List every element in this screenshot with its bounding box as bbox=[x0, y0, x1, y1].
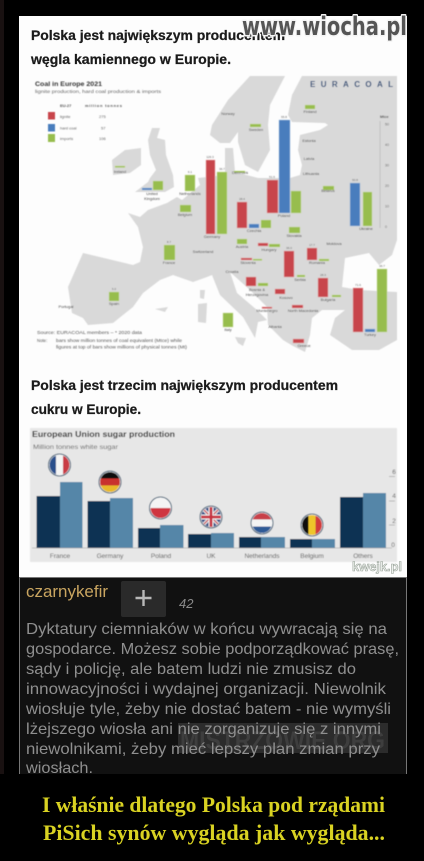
comment body bbox=[25, 621, 399, 777]
country labels: Greece bbox=[297, 343, 311, 348]
value axis: 6 bbox=[392, 469, 396, 476]
source note bbox=[37, 330, 188, 350]
Coal title and legend bbox=[35, 82, 162, 142]
flag: Netherlands bbox=[251, 512, 273, 534]
country labels: 71.6 bbox=[355, 283, 361, 287]
value axis: 0 bbox=[391, 542, 395, 549]
Mtce axis bbox=[380, 115, 389, 229]
Mtce axis: 10 bbox=[385, 204, 389, 208]
chart title: European Union sugar production bbox=[32, 429, 175, 439]
country labels: Hungary bbox=[261, 247, 277, 252]
comment body: sądy i policję, ale batem ludzi nie zmusisz do bbox=[26, 661, 356, 678]
country labels: Norway bbox=[221, 111, 235, 116]
Mtce axis: 40 bbox=[385, 143, 389, 147]
Coal title and legend: hard coal bbox=[60, 126, 77, 130]
heading: sugar: cukru w Europie. bbox=[31, 401, 141, 417]
source note: bars show million tonnes of coal equivalent (Mtce) while bbox=[56, 338, 183, 343]
flag: UK bbox=[200, 506, 222, 528]
dark bars bbox=[36, 496, 363, 548]
country labels: Croatia bbox=[226, 269, 239, 274]
plus button bbox=[121, 581, 166, 617]
country labels: 5.0 bbox=[112, 287, 116, 291]
heading: coal: Polska jest największym producentem bbox=[31, 27, 285, 43]
country axis labels: Germany bbox=[97, 553, 124, 560]
source note: figures at top of bars show millions of physical tonnes (Mt) bbox=[56, 344, 188, 350]
heading: coal: węgla kamiennego w Europie. bbox=[30, 51, 231, 67]
country labels: Montenegro bbox=[256, 308, 278, 313]
comment body: niewolnikami, żeby mieć lepszy plan zmian przy bbox=[26, 741, 380, 758]
country labels: Italy bbox=[224, 327, 232, 332]
country labels: Denmark bbox=[232, 170, 248, 175]
flag: Belgium bbox=[301, 514, 324, 536]
flag: France bbox=[48, 454, 71, 476]
country labels: 28.3 bbox=[320, 273, 326, 277]
Coal title and legend: million tonnes bbox=[85, 103, 123, 108]
country labels: 17.7 bbox=[309, 243, 315, 247]
country labels: France bbox=[163, 260, 176, 265]
country labels: Ireland bbox=[114, 169, 126, 174]
Mtce axis: Mtce bbox=[380, 115, 389, 119]
watermark: mistrzowie: MISTRZOWIE.ORG bbox=[180, 727, 385, 755]
baseline bbox=[32, 547, 392, 549]
map land bbox=[68, 76, 397, 352]
caption band bbox=[0, 774, 424, 861]
country labels: Portugal bbox=[59, 304, 74, 309]
comment body: lżejszego wiosła ani nie zorganizuje się z innymi bbox=[26, 721, 381, 738]
panel: comment bbox=[19, 577, 407, 777]
country labels: Ukraine bbox=[359, 226, 374, 231]
country labels: 8.7 bbox=[167, 240, 171, 244]
value axis: 4 bbox=[392, 493, 396, 500]
heading: coal bbox=[30, 27, 285, 67]
country labels: Serbia bbox=[294, 277, 307, 282]
country labels: United bbox=[146, 191, 158, 196]
country labels: 51.6 bbox=[269, 175, 275, 179]
country axis labels: Others bbox=[353, 553, 373, 560]
country labels: Belarus bbox=[321, 188, 335, 193]
country labels: 126.3 bbox=[206, 155, 214, 159]
country labels: Lithuania bbox=[303, 171, 320, 176]
country labels: Kosovo bbox=[279, 295, 293, 300]
bars: hard coal bbox=[142, 120, 375, 332]
country labels: Austria bbox=[236, 244, 249, 249]
comment body: innowacyjności i wydajnej organizacji. Niewolnik bbox=[26, 681, 386, 698]
Coal title and legend: 57 bbox=[101, 126, 106, 130]
Coal title and legend: 106 bbox=[99, 136, 106, 141]
country axis labels: Poland bbox=[151, 553, 171, 560]
country labels: Bulgaria bbox=[321, 297, 336, 302]
country labels: 6.1 bbox=[188, 170, 192, 174]
country labels: Slovenia bbox=[240, 260, 256, 265]
country labels: 36.7 bbox=[219, 167, 225, 171]
country labels: Herzegovina bbox=[246, 292, 269, 297]
country axis labels bbox=[50, 553, 373, 560]
country labels: Sweden bbox=[249, 127, 263, 132]
Coal title and legend: 275 bbox=[99, 114, 106, 119]
country labels: Latvia bbox=[304, 156, 315, 161]
country labels: Switzerland bbox=[193, 249, 213, 254]
country labels: Finland bbox=[303, 109, 317, 114]
value axis bbox=[389, 469, 396, 549]
map: coal in Europe bbox=[35, 76, 397, 352]
Coal title and legend: Coal in Europe 2021 bbox=[35, 82, 103, 88]
Mtce axis: 50 bbox=[385, 122, 389, 126]
country labels: 36.0 bbox=[286, 246, 292, 250]
caption text bbox=[42, 792, 385, 845]
Mtce axis: 20 bbox=[385, 184, 389, 188]
bars: lignite bbox=[206, 160, 363, 343]
panel: white infographic sheet bbox=[19, 16, 407, 577]
country labels: Romania bbox=[309, 260, 326, 265]
bars: imports bbox=[109, 105, 387, 332]
country axis labels: Belgium bbox=[300, 553, 324, 560]
flag: Poland bbox=[150, 497, 172, 519]
heading: sugar: Polska jest trzecim największym producentem bbox=[31, 377, 338, 393]
caption text: I właśnie dlatego Polska pod rządami bbox=[42, 792, 385, 817]
Coal title and legend: lignite production, hard coal production & imports bbox=[35, 89, 162, 94]
comment body: gospodarce. Możesz sobie podporządkować prasę, bbox=[26, 641, 399, 658]
country labels: Kingdom bbox=[144, 196, 161, 201]
country labels: Slovakia bbox=[286, 233, 302, 238]
light bars bbox=[60, 482, 386, 548]
comment username: czarnykefir bbox=[26, 583, 109, 601]
heading: sugar bbox=[31, 377, 338, 417]
watermark: kwejk: kwejk.pl bbox=[352, 559, 402, 574]
country labels: Poland bbox=[278, 213, 290, 218]
comment body: Dyktatury ciemniaków w końcu wywracają się na bbox=[26, 621, 387, 638]
EURACOAL logo: EURACOAL bbox=[310, 80, 395, 89]
country labels: 50.8 bbox=[352, 178, 358, 182]
chart subtitle: Million tonnes white sugar bbox=[33, 444, 119, 451]
country labels: 55.8 bbox=[281, 115, 287, 119]
Coal title and legend: EU-27 bbox=[60, 103, 72, 108]
value axis: 2 bbox=[392, 518, 396, 525]
Coal title and legend: imports bbox=[60, 136, 73, 141]
country labels: Bosnia & bbox=[249, 287, 265, 292]
country labels: Netherlands bbox=[179, 191, 201, 196]
country labels: Czechia bbox=[247, 228, 262, 233]
country labels: Moldova bbox=[326, 241, 342, 246]
country labels: Estonia bbox=[302, 138, 316, 143]
country labels: Germany bbox=[204, 234, 220, 239]
country labels: North Macedonia bbox=[288, 308, 319, 313]
caption text: PiSich synów wygląda jak wygląda... bbox=[43, 820, 385, 845]
Coal title and legend: lignite bbox=[60, 114, 71, 119]
country axis labels: Netherlands bbox=[244, 553, 280, 560]
country labels: Spain bbox=[109, 301, 119, 306]
comment body: wiosłuje tyle, żeby nie dostać batem - nie wymyśli bbox=[25, 701, 391, 718]
source note: Source: EURACOAL members – * 2020 data bbox=[37, 330, 143, 335]
chart background bbox=[30, 428, 397, 562]
country labels: 36.7 bbox=[379, 264, 385, 268]
comment body: wiosłach. bbox=[25, 760, 93, 777]
chart: EU sugar production bbox=[30, 428, 397, 562]
country labels: Albania bbox=[268, 324, 282, 329]
country axis labels: UK bbox=[206, 553, 216, 560]
country labels: Belgium bbox=[178, 212, 193, 217]
flag: Germany bbox=[99, 471, 121, 494]
country labels bbox=[59, 109, 385, 348]
country axis labels: France bbox=[50, 553, 70, 560]
source note: Note: bbox=[37, 338, 47, 343]
Mtce axis: 0 bbox=[385, 225, 387, 229]
country labels: Turkey bbox=[364, 332, 376, 337]
country labels: 28.4 bbox=[239, 197, 245, 201]
Mtce axis: 30 bbox=[385, 164, 389, 168]
vote count: 42 bbox=[179, 596, 194, 611]
